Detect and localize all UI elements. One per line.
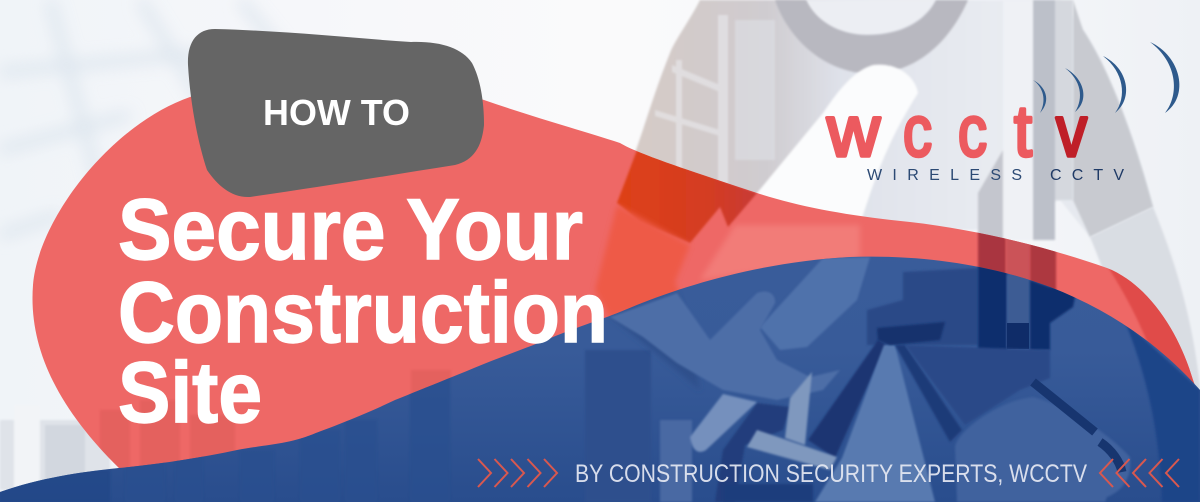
red area: sleeve and arm tints [100, 150, 1200, 470]
logo lettering: c [958, 92, 987, 172]
logo lettering: v [1056, 92, 1087, 172]
worker photo: shirt collar [775, 0, 968, 74]
logo lettering: c [903, 92, 932, 172]
logo lettering: t [1014, 92, 1032, 172]
railway road [815, 345, 935, 502]
footer right chevrons [1100, 459, 1179, 487]
WCCTV logo [826, 42, 1179, 184]
worker photo: tower on shirt right [978, 0, 1073, 240]
pale building [660, 420, 692, 502]
worker photo: shirt [617, 0, 1200, 502]
logo lettering: w [826, 92, 881, 172]
worker photo: shirt grey right panel [1073, 0, 1153, 237]
title: Site [118, 345, 262, 441]
station roof [877, 322, 945, 345]
blueprints in blue [760, 257, 870, 350]
city buildings [0, 375, 450, 502]
logo tagline [867, 167, 1124, 184]
worker photo: rolled blueprints [740, 65, 918, 225]
hard hat [955, 397, 1130, 502]
dark tower [586, 350, 650, 402]
logo lettering [826, 92, 1087, 172]
blueprints in red [700, 225, 860, 280]
background scaffolding [0, 0, 330, 300]
footer byline: BY CONSTRUCTION SECURITY EXPERTS, WCCTV [575, 460, 1087, 488]
logo tagline: WIRELESS [867, 167, 1022, 184]
dark foreground bottom [734, 484, 813, 502]
pale city skyline [0, 405, 110, 495]
logo tagline: CCTV [1050, 167, 1124, 184]
logo signal arcs [1033, 42, 1179, 113]
right arm in red [1108, 268, 1194, 384]
city in red [100, 370, 451, 470]
foreground tower [978, 262, 1007, 352]
railway dark band [808, 340, 886, 458]
forearm in red [595, 205, 690, 318]
red wave shape [0, 96, 1194, 492]
railway right track [895, 345, 962, 442]
grey how-to badge [188, 29, 484, 197]
trackside yard [905, 345, 1050, 425]
blue area: photo details [0, 257, 1200, 502]
lower roll [690, 394, 757, 452]
hard hat strap [1033, 382, 1122, 472]
footer left chevrons [478, 459, 557, 487]
worker photo: right arm [1090, 207, 1200, 502]
distant block of flats [867, 268, 978, 345]
hammer tool [747, 372, 837, 470]
lower-left arm shadow [610, 292, 696, 382]
blue wave shape [0, 256, 1200, 502]
title: Secure Your [118, 182, 583, 278]
right arm in blue [1125, 322, 1200, 502]
sleeve in red [617, 150, 757, 243]
worker photo: neck [806, 0, 936, 35]
tower in red [977, 232, 1006, 273]
how-to label: HOW TO [263, 92, 410, 133]
title: Construction [118, 265, 608, 361]
dark gap below the hand [715, 403, 790, 502]
hand holding plans [610, 291, 840, 400]
title [118, 182, 608, 441]
worker photo: building on shirt left [655, 15, 775, 190]
